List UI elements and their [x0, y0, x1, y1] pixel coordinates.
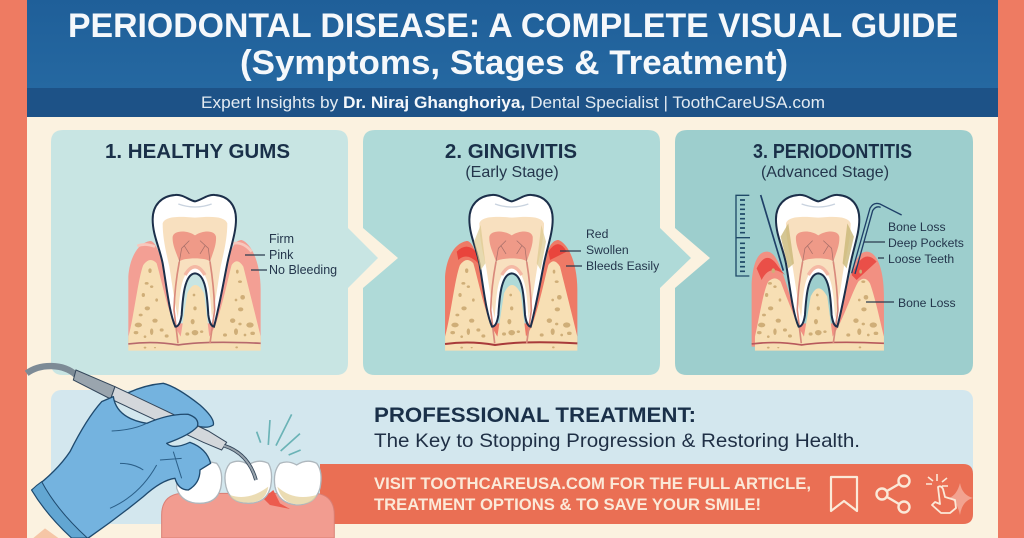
labels: Pink [269, 248, 294, 262]
glove [32, 397, 211, 538]
instrument cord [27, 366, 76, 375]
probe right [852, 203, 902, 274]
call to action banner [320, 464, 973, 524]
illustration: dental cleaning [27, 366, 334, 538]
arm [33, 528, 58, 538]
icon: periodontal ruler [736, 195, 902, 276]
instrument [73, 370, 115, 399]
back fingers [123, 383, 213, 427]
labels: Swollen [586, 243, 629, 257]
illustration: healthy tooth [128, 195, 261, 351]
labels: Red [586, 227, 608, 241]
labels [586, 227, 660, 273]
panel: gingivitis [363, 130, 691, 375]
title [68, 7, 958, 82]
gum [162, 493, 334, 538]
heading: PROFESSIONAL TREATMENT: [374, 403, 696, 427]
text: The Key to Stopping Progression & Restoring Health. [374, 430, 860, 452]
heading: 2. GINGIVITIS [445, 140, 577, 163]
panel: periodontitis [675, 130, 973, 375]
labels: Deep Pockets [888, 236, 964, 250]
labels: Firm [269, 232, 294, 246]
labels: Bone Loss [898, 296, 956, 310]
tartar [230, 487, 317, 504]
panel: healthy gums [51, 130, 378, 375]
probe left [761, 195, 783, 271]
subheading: (Early Stage) [465, 164, 559, 181]
icon: bookmark [831, 477, 857, 511]
illustration: inflamed tooth [445, 195, 577, 351]
byline bar [27, 88, 998, 117]
icon: click hand [926, 474, 973, 515]
labels [269, 232, 337, 277]
subheading: (Advanced Stage) [761, 164, 889, 181]
right border [998, 0, 1024, 538]
illustration: advanced tooth [752, 195, 884, 351]
bleeding [263, 490, 290, 509]
text [374, 475, 811, 514]
labels: No Bleeding [269, 263, 337, 277]
sparkle lines [257, 414, 301, 455]
panel: professional treatment [51, 390, 973, 524]
heading: 3. PERIODONTITIS [753, 141, 912, 163]
byline bar: Expert Insights by Dr. Niraj Ghanghoriya, Dental Specialist | ToothCareUSA.com [201, 94, 825, 112]
icon: share [876, 476, 910, 512]
glove cuff [32, 482, 87, 538]
teeth [177, 461, 321, 505]
title: PERIODONTAL DISEASE: A COMPLETE VISUAL GUIDE [68, 7, 958, 45]
title: (Symptoms, Stages & Treatment) [240, 44, 788, 82]
left border [0, 0, 27, 538]
labels: Loose Teeth [888, 252, 954, 266]
labels: Bleeds Easily [586, 259, 660, 273]
header [27, 0, 998, 88]
labels: Bone Loss [888, 220, 946, 234]
glove creases [110, 423, 182, 508]
labels [888, 220, 964, 310]
text: VISIT TOOTHCAREUSA.COM FOR THE FULL ARTICLE, [374, 475, 811, 493]
text: TREATMENT OPTIONS & TO SAVE YOUR SMILE! [374, 496, 761, 514]
heading: 1. HEALTHY GUMS [105, 140, 290, 163]
